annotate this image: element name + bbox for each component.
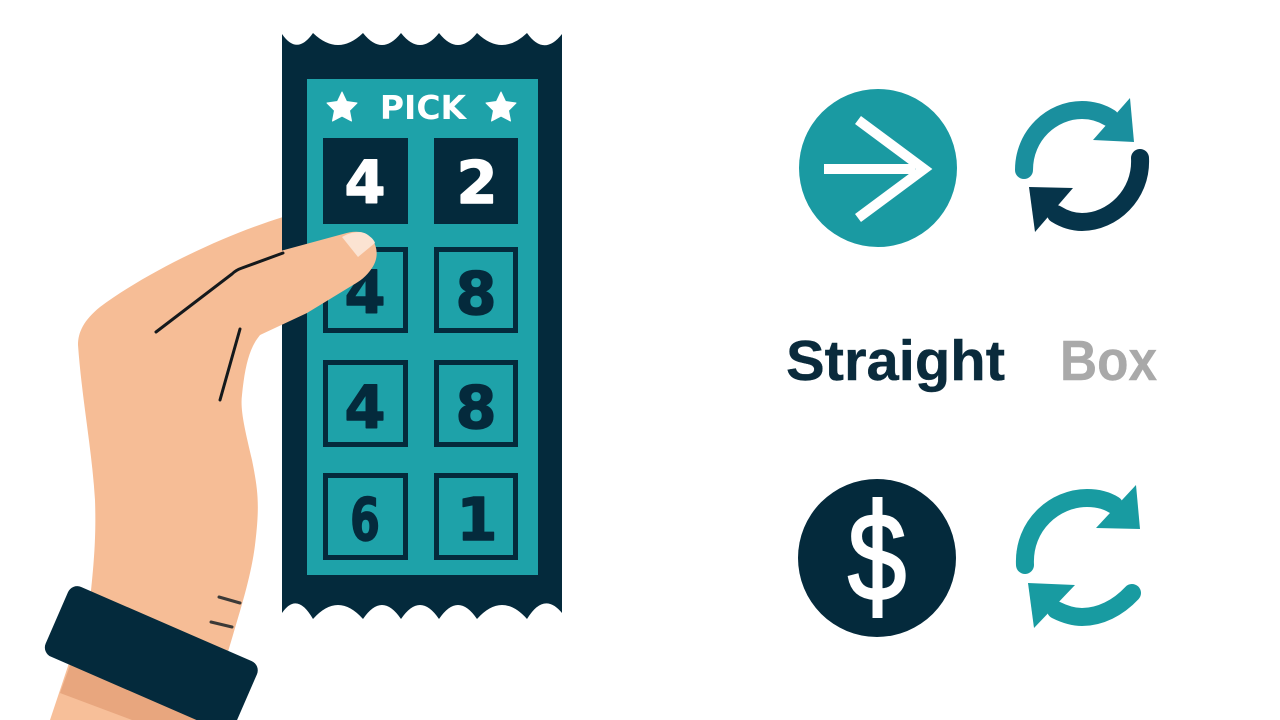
forearm below wristband [50, 660, 205, 720]
teal inner panel [307, 79, 538, 575]
icon: refresh arrows teal and navy [1024, 98, 1140, 232]
ticket heading: PICK with stars: PICK [380, 88, 468, 127]
selected number 4: 4 [344, 148, 386, 217]
number box 1 [436, 476, 516, 558]
number box 8 [436, 250, 516, 330]
ticket heading: PICK with stars [327, 88, 516, 127]
label: Straight: Straight [786, 329, 1005, 393]
number box 8 [436, 362, 516, 444]
number box 4 [326, 250, 406, 330]
selected number 2: 2 [456, 148, 498, 217]
number box 6: 6 [350, 485, 380, 554]
icon: straight arrow in teal circle [799, 89, 957, 247]
wristband [42, 583, 261, 720]
number box 8: 8 [455, 259, 497, 328]
number box 4: 4 [344, 373, 386, 442]
thumbnail [342, 232, 375, 257]
number box 6 [326, 476, 406, 558]
wrist crease lines [211, 597, 240, 627]
number box 1: 1 [456, 485, 498, 554]
ticket body with scalloped edges [282, 33, 562, 619]
thumb over ticket [260, 232, 377, 335]
icon: dollar in navy circle: $ [848, 488, 906, 627]
icon: refresh arrows teal [1025, 485, 1140, 628]
number box 8: 8 [455, 373, 497, 442]
selected number 2 [434, 138, 518, 224]
number box 4 [326, 362, 406, 444]
selected number 4 [323, 138, 408, 224]
icon: dollar in navy circle [798, 479, 956, 637]
hand crease lines [156, 253, 283, 400]
hand palm [78, 215, 320, 680]
number box 4: 4 [344, 258, 386, 327]
label: Box: Box [1060, 329, 1157, 393]
lottery ticket [282, 33, 562, 619]
